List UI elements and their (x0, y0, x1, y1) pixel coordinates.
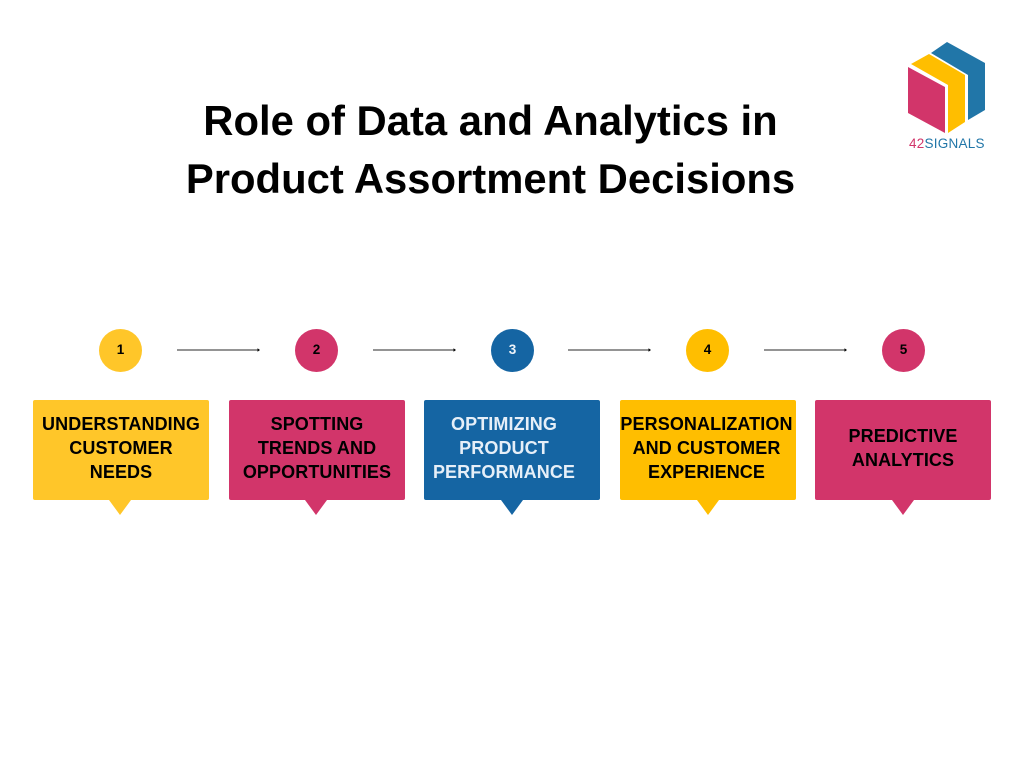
callout: spotting trends and opportunities (229, 400, 405, 515)
title: Product Assortment Decisions (186, 155, 795, 202)
callout: personalization and customer experience: EXPERIENCE (648, 462, 765, 482)
callout: optimizing product performance (424, 400, 600, 515)
callout: predictive analytics: PREDICTIVE (848, 426, 958, 446)
logo: 42signals (908, 42, 985, 151)
callout: understanding customer needs (33, 400, 209, 515)
callout: optimizing product performance: PERFORMANCE (433, 462, 575, 482)
step 4 number: 4 (704, 342, 711, 357)
arrow 3 to 4 (568, 348, 651, 352)
callout: understanding customer needs: CUSTOMER (69, 438, 173, 458)
callout: understanding customer needs: NEEDS (90, 462, 152, 482)
arrow 1 to 2 (177, 348, 260, 352)
step 5 number: 5 (900, 342, 907, 357)
callout: optimizing product performance: OPTIMIZING (451, 414, 557, 434)
callout: personalization and customer experience: AND CUSTOMER (633, 438, 780, 458)
step 1 number (99, 329, 142, 372)
step 3 number: 3 (509, 342, 516, 357)
callout: optimizing product performance: PRODUCT (459, 438, 549, 458)
step 3 number (491, 329, 534, 372)
title (186, 97, 795, 202)
callout: spotting trends and opportunities: SPOTTING (271, 414, 363, 434)
arrow 4 to 5 (764, 348, 847, 352)
callout: understanding customer needs: UNDERSTANDING (42, 414, 200, 434)
arrow 2 to 3 (373, 348, 456, 352)
callout: predictive analytics: ANALYTICS (852, 450, 954, 470)
callout: predictive analytics (815, 400, 991, 515)
logo: 42signals: 42SIGNALS (909, 136, 985, 151)
step 1 number: 1 (117, 342, 124, 357)
step 2 number (295, 329, 338, 372)
step 4 number (686, 329, 729, 372)
callout: spotting trends and opportunities: OPPORTUNITIES (243, 462, 391, 482)
title: Role of Data and Analytics in (203, 97, 778, 144)
callout: personalization and customer experience: PERSONALIZATION (620, 414, 793, 434)
callout: spotting trends and opportunities: TRENDS AND (258, 438, 376, 458)
step 5 number (882, 329, 925, 372)
step 2 number: 2 (313, 342, 320, 357)
callout: personalization and customer experience (620, 400, 796, 515)
